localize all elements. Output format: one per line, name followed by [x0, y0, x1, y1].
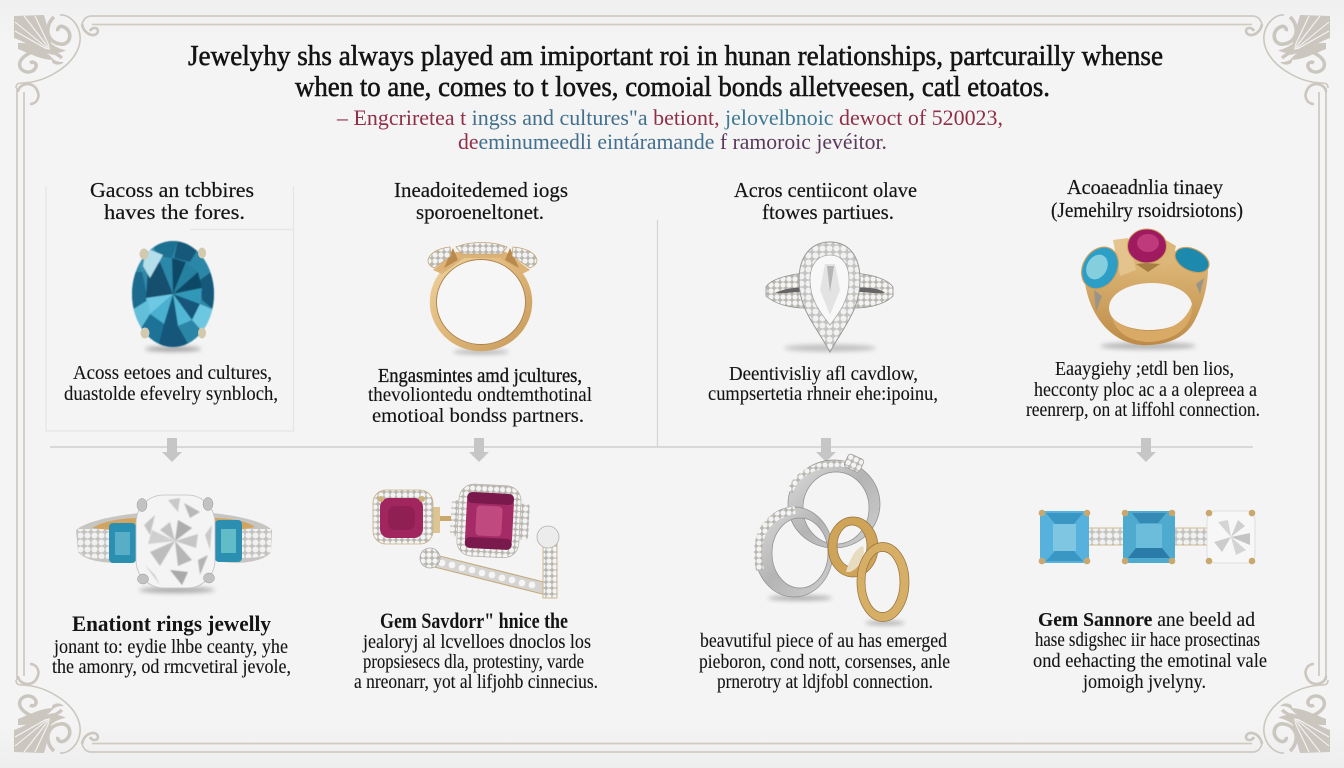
subtitle: – Engcriretea t ingss and cultures"a betiont, jelovelbnoic dewoct of 520023, — [336, 105, 1003, 130]
arrow 3 — [816, 438, 836, 462]
text: jomoigh jvelyny. — [1082, 671, 1206, 693]
corner ornament: top right — [1246, 15, 1330, 104]
text: Engasmintes amd jcultures, — [378, 365, 582, 387]
subtitle: deeminumeedli eintáramande f ramoroic jevéitor. — [458, 129, 887, 154]
arrow 2 — [469, 438, 489, 462]
text — [708, 363, 938, 405]
text: jonant to: eydie lhbe ceanty, yhe — [53, 636, 288, 658]
arrow 1 — [162, 438, 182, 462]
text: emotioal bondss partners. — [372, 405, 584, 427]
corner ornament: bottom right — [1246, 664, 1330, 753]
text: Gem Savdorr" hnice the — [380, 608, 568, 633]
panel: stacked rings — [699, 453, 950, 693]
title: Jewelyhy shs always played am imiportant roi in hunan relationships, partcurailly whense — [188, 40, 1163, 72]
panel: tri-gem gold ring — [1026, 175, 1260, 421]
text — [354, 608, 598, 693]
panel: gem row — [1033, 510, 1267, 693]
panel: blue oval gem — [64, 178, 278, 405]
column and row dividers — [46, 186, 1253, 447]
heading: Acoaeadnlia tinaey — [1067, 175, 1223, 199]
text: a nreonarr, yot al lifjohb cinnecius. — [354, 671, 598, 693]
panel: diamond ring with blue side stones — [52, 495, 291, 678]
text — [52, 611, 291, 678]
text: propsiesecs dla, protestiny, varde — [363, 651, 584, 673]
heading: Gacoss an tcbbires — [90, 178, 254, 202]
text: Deentivisliy afl cavdlow, — [729, 363, 918, 385]
icon: silver and gold wedding rings — [755, 453, 909, 625]
title — [188, 40, 1163, 103]
heading: Ineadoitedemed iogs — [394, 178, 568, 202]
text: cumpsertetia rhneir ehe:ipoinu, — [708, 383, 938, 405]
text — [1026, 358, 1260, 421]
icon: ruby jewelry set — [373, 483, 559, 598]
icon: blue and white gemstones on a bar — [1039, 510, 1255, 564]
text: pieboron, cond nott, corsenses, anle — [699, 651, 950, 673]
text: reenrerp, on at liffohl connection. — [1026, 399, 1260, 421]
icon: diamond and blue stone ring — [76, 495, 272, 593]
heading — [1051, 175, 1243, 222]
corner ornament: top left — [14, 15, 98, 104]
text: hase sdigshec iir hace prosectinas — [1035, 629, 1260, 651]
text: Eaaygiehy ;etdl ben lios, — [1055, 358, 1234, 380]
text — [64, 362, 278, 405]
text: Acoss eetoes and cultures, — [73, 362, 272, 384]
heading: sporoeneltonet. — [416, 200, 544, 224]
text: hecconty ploc ac a a olepreea a — [1034, 379, 1257, 401]
subtitle — [336, 105, 1003, 154]
text — [1033, 609, 1267, 693]
heading: ftowes partiues. — [762, 200, 894, 224]
panel: pear diamond ring — [708, 178, 938, 405]
title: when to ane, comes to t loves, comoial bonds alletveesen, catl etoatos. — [295, 71, 1050, 103]
text: Enationt rings jewelly — [72, 611, 271, 636]
heading — [394, 178, 568, 224]
icon: gold ring with ruby and blue stones — [1074, 229, 1213, 350]
heading — [734, 178, 917, 224]
text: the amonry, od rmcvetiral jevole, — [52, 656, 291, 678]
text: beavutiful piece of au has emerged — [700, 630, 947, 652]
icon: pear halo diamond ring — [766, 242, 893, 352]
heading: (Jemehilry rsoidrsiotons) — [1051, 198, 1243, 222]
panel: gold ring — [368, 178, 592, 427]
heading: haves the fores. — [104, 200, 245, 224]
text: jealoryj al lcvelloes dnoclos los — [362, 631, 591, 653]
text: ond eehacting the emotinal vale — [1033, 650, 1267, 672]
arrow 4 — [1136, 438, 1156, 462]
text: duastolde efevelry synbloch, — [64, 383, 278, 405]
heading: Acros centiicont olave — [734, 178, 917, 202]
text: Gem Sannore ane beeld ad — [1038, 609, 1255, 631]
text: thevoliontedu ondtemthotinal — [368, 384, 592, 406]
icon: oval blue gemstone — [132, 240, 214, 352]
panel: ruby earrings — [354, 483, 598, 693]
text — [368, 365, 592, 427]
icon: gold ring with three stones — [428, 242, 537, 354]
corner ornament: bottom left — [14, 664, 98, 753]
heading — [90, 178, 254, 224]
text: prnerotry at ldjfobl connection. — [717, 671, 933, 693]
text — [699, 630, 950, 693]
